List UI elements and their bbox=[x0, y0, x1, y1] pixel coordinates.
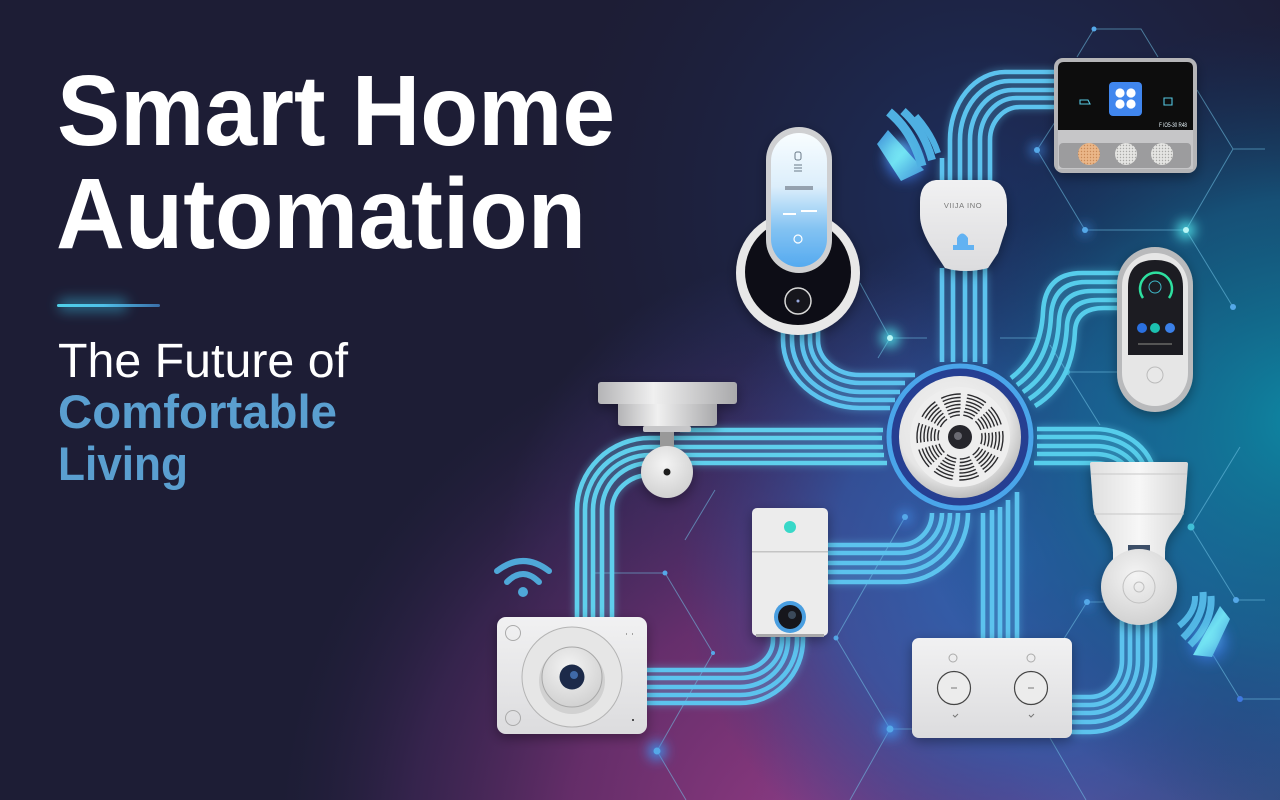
subtitle: Living bbox=[58, 437, 188, 490]
panel screen bbox=[1058, 62, 1193, 130]
doorbell screen bbox=[1128, 260, 1183, 355]
icon: wifi bbox=[497, 561, 549, 597]
hexagon network lines and nodes bbox=[595, 26, 1280, 800]
device: cylinder camera bbox=[752, 508, 828, 637]
device: bulb sensor bbox=[1090, 462, 1188, 625]
lines: hub to wall switch bbox=[983, 492, 1017, 642]
device: hub smoke sensor bbox=[889, 366, 1031, 508]
switch button left bbox=[938, 654, 970, 717]
device: ceiling sensor bbox=[598, 382, 737, 498]
title bbox=[56, 55, 615, 270]
lines: panel to bridge bbox=[942, 72, 1058, 184]
device: white bridge: VIIJA INO bbox=[944, 201, 982, 210]
title: Smart Home bbox=[57, 55, 615, 167]
subtitle: The Future of bbox=[58, 335, 349, 388]
device: wall switch bbox=[912, 638, 1072, 738]
lines: right doorbell to hub bbox=[1011, 273, 1120, 406]
lines: hub to bulb bbox=[1034, 429, 1155, 480]
panel knobs bbox=[1059, 143, 1191, 168]
divider line bbox=[57, 298, 160, 312]
hub vents bbox=[911, 388, 1009, 486]
device: right doorbell bbox=[1117, 247, 1193, 412]
device: round doorbell with pill display bbox=[736, 127, 860, 335]
lines: ceiling sensor and camera to hub bbox=[577, 430, 887, 620]
device: security camera box bbox=[497, 617, 647, 734]
lines: bulb to wall switch bbox=[1070, 610, 1155, 732]
subtitle: Comfortable bbox=[58, 385, 337, 438]
device: smart display panel bbox=[1054, 58, 1197, 173]
panel screen: F IO5-30 R48 bbox=[1159, 123, 1188, 129]
subtitle bbox=[58, 335, 349, 490]
lines: camera to cylinder camera bbox=[645, 632, 803, 703]
device: white bridge bbox=[920, 180, 1007, 271]
switch button right bbox=[1014, 654, 1048, 717]
title: Automation bbox=[56, 158, 586, 270]
lines: cylinder camera to hub bbox=[826, 513, 968, 582]
lines: doorbell to hub bbox=[783, 325, 915, 408]
pill screen bbox=[766, 127, 832, 273]
icon: signal waves top bbox=[877, 111, 938, 181]
icon: signal waves bottom right bbox=[1179, 592, 1230, 662]
lines: bridge to hub bbox=[942, 268, 985, 364]
connection lines bbox=[577, 72, 1155, 732]
